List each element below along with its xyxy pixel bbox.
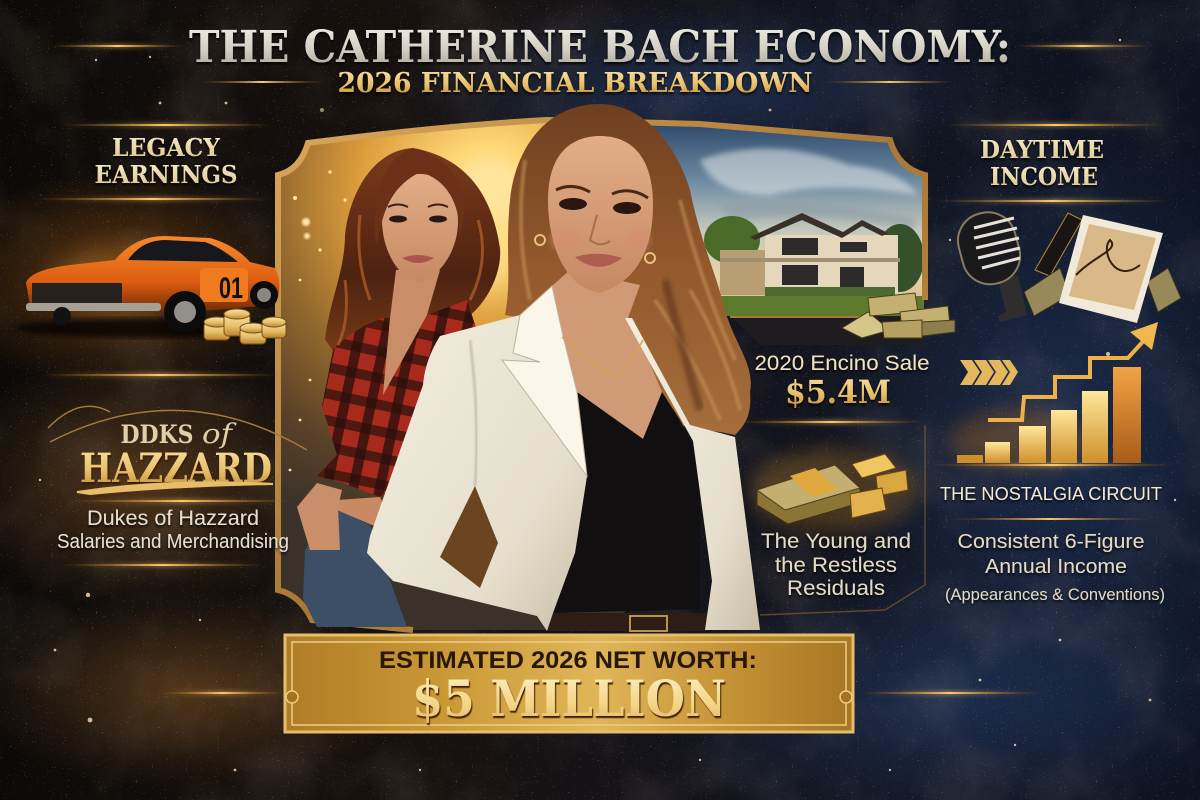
icon: orange muscle car: 01 — [219, 272, 243, 305]
residuals text: The Young and — [761, 530, 911, 553]
legacy earnings description: Dukes of Hazzard — [87, 507, 259, 530]
panel: central portrait frame — [278, 120, 925, 630]
legacy earnings description — [57, 507, 289, 553]
nostalgia income text: Annual Income — [985, 556, 1127, 578]
icon: microphone — [952, 206, 1027, 322]
panel: Encino sale — [740, 293, 955, 423]
title: THE CATHERINE BACH ECONOMY: — [189, 22, 1011, 73]
figure: younger woman in plaid shirt — [297, 148, 500, 627]
legacy earnings heading: LEGACY — [112, 133, 221, 162]
nostalgia income text — [945, 531, 1165, 604]
figure: Catherine Bach in white blazer — [367, 104, 760, 631]
bar chart: rising income — [930, 322, 1175, 470]
nostalgia income text: (Appearances & Conventions) — [945, 585, 1165, 604]
legacy earnings heading — [35, 124, 270, 200]
icon: cash pile — [842, 293, 955, 338]
icon: cash and gold bars — [750, 448, 920, 532]
dukes of hazzard logo: HAZZARD — [80, 445, 272, 492]
residuals text: Residuals — [787, 577, 885, 600]
residuals text: the Restless — [775, 554, 897, 577]
dukes of hazzard logo — [48, 406, 307, 494]
dukes of hazzard logo: of — [202, 419, 237, 450]
daytime income heading — [935, 124, 1170, 202]
house scene — [640, 124, 924, 345]
gilded frame border — [278, 120, 925, 630]
daytime income heading: DAYTIME — [980, 135, 1104, 164]
subtitle: 2026 FINANCIAL BREAKDOWN — [338, 68, 812, 99]
panel: left legacy earnings — [15, 124, 307, 566]
residuals text — [761, 530, 911, 600]
dukes of hazzard logo: DDKS — [120, 420, 194, 449]
banner label: ESTIMATED 2026 NET WORTH: — [379, 647, 757, 674]
panel: right daytime income — [930, 124, 1181, 604]
encino sale value: $5.4M — [785, 373, 891, 411]
legacy earnings heading: EARNINGS — [94, 160, 238, 189]
encino sale label: 2020 Encino Sale — [754, 352, 930, 375]
sparkles in gold panel — [289, 170, 471, 532]
panel: Young and the Restless residuals — [750, 425, 925, 615]
net worth banner — [160, 635, 1040, 732]
blazer — [367, 286, 760, 631]
legacy earnings description: Salaries and Merchandising — [57, 531, 289, 553]
icon: gold coin stacks — [204, 309, 286, 344]
icon: orange muscle car — [15, 236, 285, 338]
icon: autograph photo and pen — [1024, 213, 1181, 323]
nostalgia income text: Consistent 6-Figure — [958, 531, 1144, 553]
banner value: $5 MILLION — [412, 669, 726, 728]
nostalgia circuit heading: THE NOSTALGIA CIRCUIT — [940, 484, 1162, 504]
daytime income heading: INCOME — [990, 162, 1098, 191]
